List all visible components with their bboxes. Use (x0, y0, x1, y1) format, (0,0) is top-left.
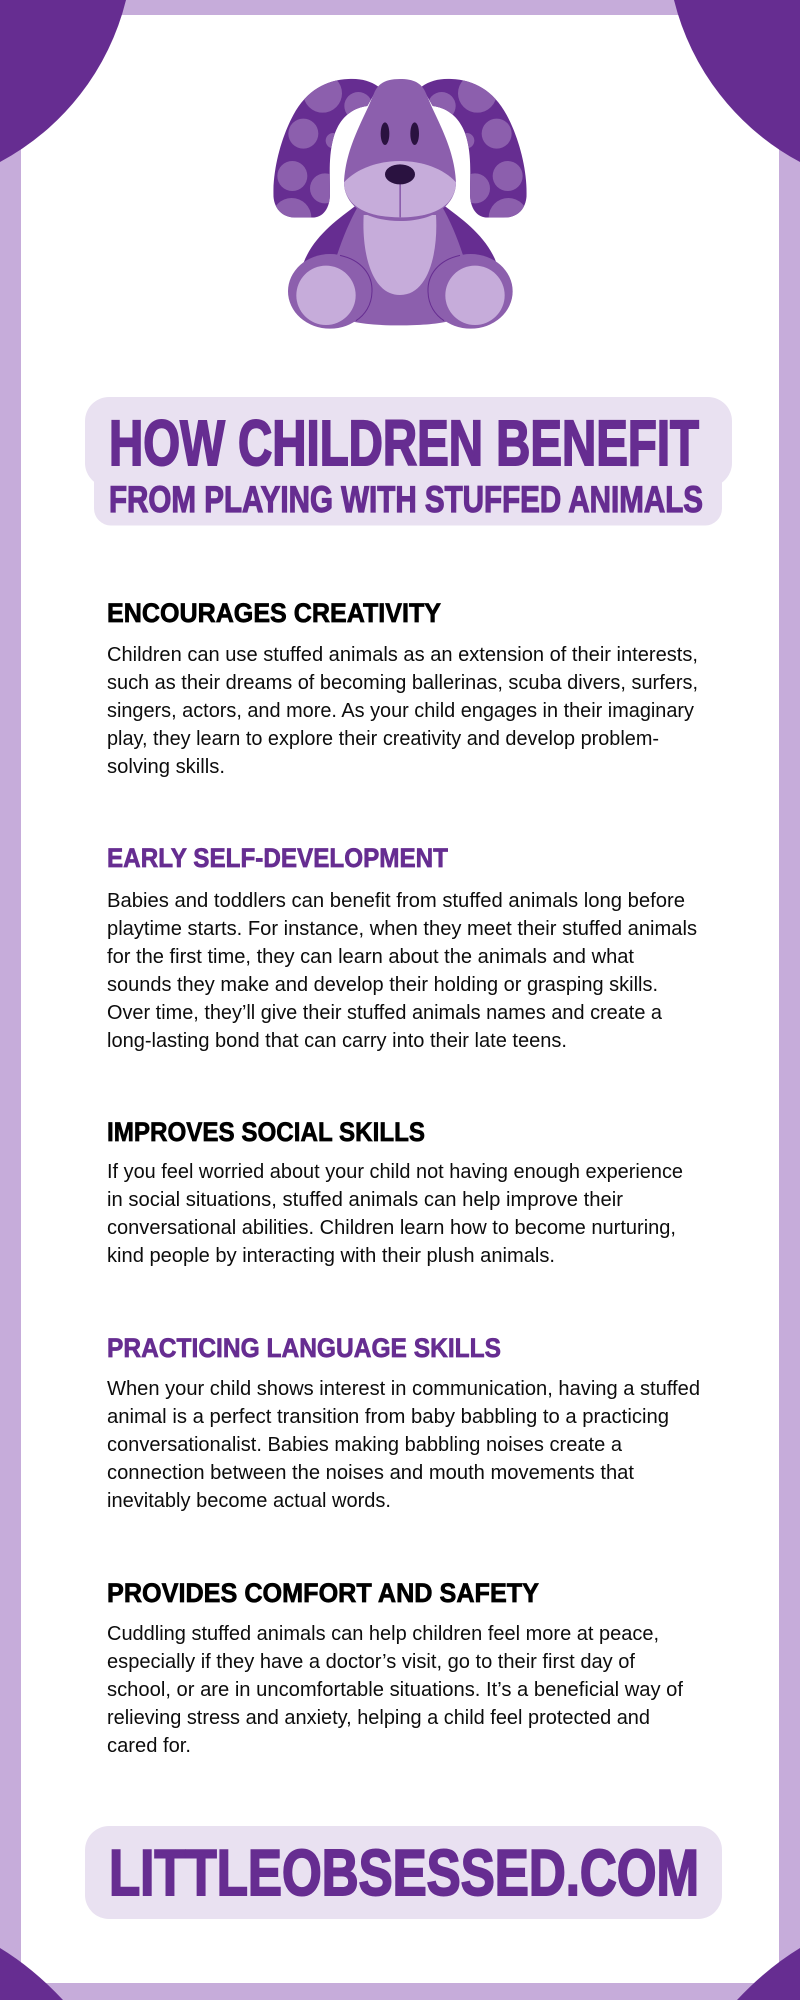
right foot (428, 254, 513, 329)
body text: especially if they have a doctor’s visit, go to their first day of (107, 1651, 635, 1673)
left ear (273, 78, 378, 218)
corner: top right (674, 0, 800, 162)
corner: bottom left (0, 1948, 63, 2000)
body text: Children can use stuffed animals as an extension of their interests, (107, 644, 698, 666)
title banner (85, 397, 732, 526)
body text (107, 1623, 683, 1757)
banner upper pill (85, 397, 732, 487)
section: improves social skills (107, 1117, 683, 1267)
body text (107, 890, 697, 1052)
body text (107, 1161, 683, 1267)
body text: in social situations, stuffed animals can help improve their (107, 1189, 623, 1211)
section: practicing language skills (107, 1333, 700, 1512)
banner lower pill (94, 440, 722, 526)
section: encourages creativity (107, 598, 698, 778)
body text: connection between the noises and mouth movements that (107, 1462, 634, 1484)
muzzle (344, 161, 456, 217)
section: early self-development (107, 843, 697, 1052)
left eye (381, 122, 389, 145)
body text: kind people by interacting with their plush animals. (107, 1245, 555, 1267)
section: provides comfort and safety (107, 1578, 683, 1757)
body (303, 205, 497, 263)
body text: singers, actors, and more. As your child engages in their imaginary (107, 700, 694, 722)
body text: relieving stress and anxiety, helping a child feel protected and (107, 1707, 650, 1729)
body text: conversationalist. Babies making babbling noises create a (107, 1434, 623, 1456)
body text: such as their dreams of becoming ballerinas, scuba divers, surfers, (107, 672, 698, 694)
belly (363, 215, 436, 295)
right eye (410, 122, 419, 145)
body text: If you feel worried about your child not having enough experience (107, 1161, 683, 1183)
body text: Over time, they’ll give their stuffed animals names and create a (107, 1002, 663, 1024)
nose (385, 164, 415, 184)
corner: top left (0, 0, 126, 162)
heading: IMPROVES SOCIAL SKILLS (107, 1117, 425, 1147)
body text: Cuddling stuffed animals can help children feel more at peace, (107, 1623, 659, 1645)
body text: Babies and toddlers can benefit from stuffed animals long before (107, 890, 685, 912)
body text: inevitably become actual words. (107, 1490, 391, 1512)
mouth line (399, 183, 401, 217)
body text: sounds they make and develop their holding or grasping skills. (107, 974, 658, 996)
heading: ENCOURAGES CREATIVITY (107, 598, 441, 628)
corner: bottom right (737, 1948, 800, 2000)
right ear (422, 78, 527, 218)
body text: cared for. (107, 1735, 191, 1757)
footer pill (85, 1826, 722, 1919)
body text: play, they learn to explore their creativity and develop problem- (107, 728, 659, 750)
icon: stuffed dog (270, 74, 530, 329)
body text: solving skills. (107, 756, 225, 778)
body text: school, or are in uncomfortable situations. It’s a beneficial way of (107, 1679, 683, 1701)
body text: When your child shows interest in communication, having a stuffed (107, 1378, 700, 1400)
body text (107, 644, 698, 778)
heading: PROVIDES COMFORT AND SAFETY (107, 1578, 539, 1608)
body text: for the first time, they can learn about the animals and what (107, 946, 634, 968)
body text: animal is a perfect transition from baby babbling to a practicing (107, 1406, 669, 1428)
left foot (288, 254, 372, 329)
body text: playtime starts. For instance, when they meet their stuffed animals (107, 918, 697, 940)
heading: EARLY SELF-DEVELOPMENT (107, 843, 448, 873)
body text: conversational abilities. Children learn how to become nurturing, (107, 1217, 676, 1239)
body text (107, 1378, 700, 1512)
footer banner (85, 1826, 722, 1919)
body text: long-lasting bond that can carry into their late teens. (107, 1030, 567, 1052)
heading: PRACTICING LANGUAGE SKILLS (107, 1333, 501, 1363)
head (344, 79, 456, 221)
torso (336, 206, 464, 325)
